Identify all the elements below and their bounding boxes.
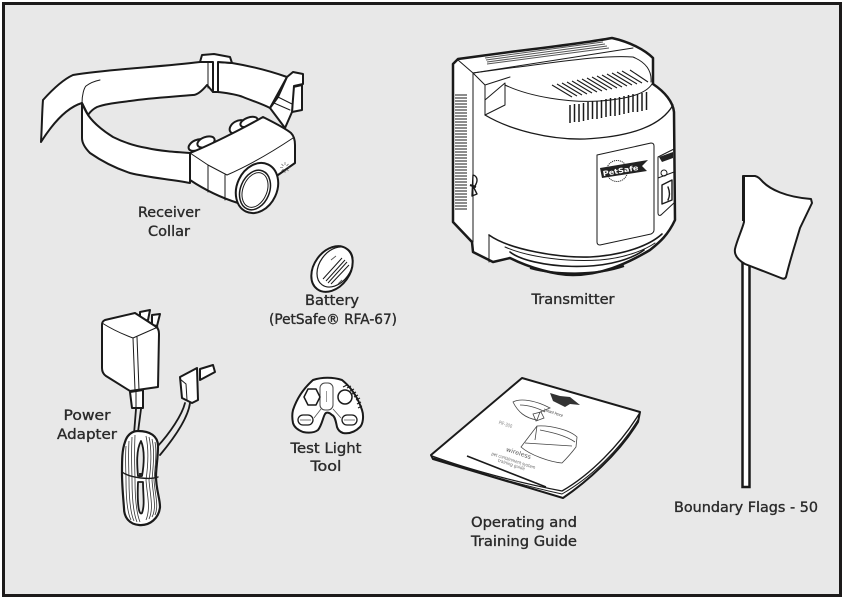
- top vents: [485, 42, 609, 64]
- indicator light: [280, 162, 290, 173]
- icon: guide booklet: [431, 378, 640, 498]
- guide cover text: wireless: [505, 446, 532, 461]
- label: test light: Test Light: [289, 441, 362, 457]
- icon: guide booklet: Instant Fence: [543, 407, 564, 418]
- knobs: [187, 137, 207, 153]
- label: collar: Collar: [148, 224, 190, 240]
- label: battery model: (PetSafe® RFA-67): [269, 312, 397, 328]
- back strap with tail: [41, 62, 287, 142]
- coil: [122, 431, 160, 525]
- receiver body: [190, 117, 295, 203]
- icon: battery: [303, 238, 361, 300]
- guide transmitter drawing: [521, 426, 577, 463]
- side vents: [455, 95, 467, 209]
- logo: [606, 160, 628, 182]
- icon: guide booklet: PIF-300: [498, 420, 513, 430]
- icon: boundary flag: [735, 176, 812, 487]
- icon: receiver collar: [41, 54, 303, 220]
- plug head: [180, 368, 198, 403]
- label: boundary flags: Boundary Flags - 50: [674, 500, 818, 516]
- label: battery: Battery: [305, 293, 359, 309]
- dome vents: [552, 70, 648, 97]
- coil windings: [126, 435, 157, 522]
- strap keeper: [200, 54, 232, 92]
- icon: test light tool: [292, 378, 363, 433]
- label: adapter: Adapter: [57, 427, 117, 443]
- front strap: [82, 103, 190, 183]
- label: tool: Tool: [309, 459, 342, 475]
- label: transmitter: Transmitter: [530, 292, 615, 308]
- icon: transmitter: [453, 38, 675, 275]
- lens: [228, 156, 286, 220]
- label: operating and: Operating and: [471, 515, 577, 531]
- guide logo: [550, 393, 580, 407]
- label: training guide: Training Guide: [470, 534, 577, 550]
- label: power: Power: [64, 408, 111, 424]
- buckle: [292, 85, 302, 112]
- latch: [472, 175, 477, 196]
- base: [488, 235, 490, 262]
- label: receiver collar: Receiver: [138, 205, 200, 221]
- guide collar drawing: [513, 400, 550, 421]
- icon: guide booklet: pet containment system: [491, 451, 536, 471]
- icon: power adapter: [102, 310, 215, 525]
- label panel: [597, 143, 654, 245]
- side controls: [658, 149, 675, 215]
- icon: guide booklet: training guide: [497, 458, 526, 472]
- icon: transmitter: PetSafe: [602, 164, 639, 178]
